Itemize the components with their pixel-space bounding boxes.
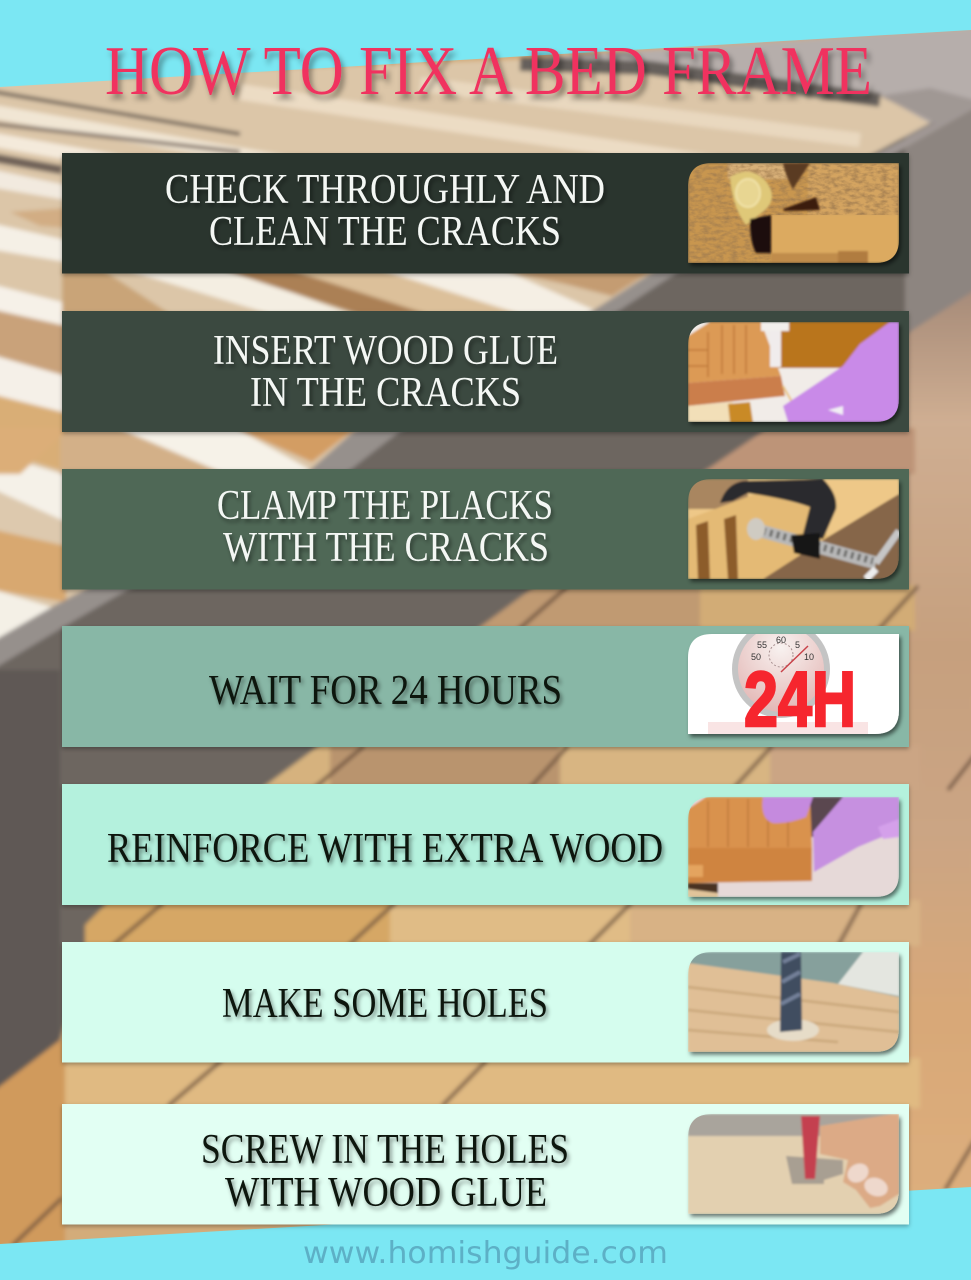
step 3 photo: C-clamp on wood bbox=[688, 479, 899, 579]
step 7 text: SCREW IN THE HOLES bbox=[201, 1127, 569, 1173]
panel: step 2 bbox=[62, 311, 909, 432]
floor seams bbox=[12, 428, 971, 1246]
step 4 photo: 24H stopwatch: 60 bbox=[776, 635, 786, 645]
step 4 photo: 24H stopwatch: 5 bbox=[795, 640, 800, 650]
step 4 photo: 24H stopwatch: 55 bbox=[757, 640, 767, 650]
step 7 photo: screw and fingers bbox=[688, 1114, 899, 1214]
top grey rim bbox=[530, 28, 971, 123]
step 6 text: MAKE SOME HOLES bbox=[222, 981, 548, 1027]
title: HOW TO FIX A BED FRAME bbox=[105, 33, 872, 110]
gap slats, panels 1-2 bbox=[62, 262, 656, 314]
step 4 photo: 24H stopwatch: 24H bbox=[744, 655, 856, 743]
left margin stripes bbox=[0, 170, 66, 642]
step 2 text: IN THE CRACKS bbox=[250, 370, 521, 416]
bed frame side bbox=[0, 100, 971, 1090]
step 4 text: WAIT FOR 24 HOURS bbox=[209, 668, 562, 714]
step 1 photo: cracked wood with glue bbox=[688, 163, 899, 263]
website URL: www.homishguide.com bbox=[303, 1236, 668, 1271]
step 6 photo: drill bit in wood bbox=[688, 952, 899, 1052]
top cyan shape bbox=[0, 0, 971, 87]
panel: step 5 bbox=[62, 784, 909, 905]
step 1 text: CLEAN THE CRACKS bbox=[209, 209, 561, 255]
slat area bbox=[0, 58, 930, 640]
panel: step 1 bbox=[62, 153, 909, 274]
step 5 text: REINFORCE WITH EXTRA WOOD bbox=[107, 826, 663, 872]
frame top-edge highlight strip bbox=[0, 270, 681, 668]
step 3 text: CLAMP THE PLACKS bbox=[217, 483, 553, 529]
step 2 text bbox=[213, 328, 558, 416]
upper slats bbox=[0, 84, 860, 215]
panel: step 6 bbox=[62, 942, 909, 1062]
panel: step 7 bbox=[62, 1104, 909, 1224]
step 7 text: WITH WOOD GLUE bbox=[225, 1170, 547, 1216]
floor strip colours seen between panels bbox=[0, 428, 920, 1255]
step 4 photo: 24H stopwatch bbox=[687, 634, 904, 740]
panel: step 4 bbox=[62, 620, 909, 747]
step 4 photo: 24H stopwatch: 50 bbox=[751, 652, 761, 662]
step 4 photo: 24H stopwatch: 10 bbox=[804, 652, 814, 662]
step 1 text bbox=[165, 167, 605, 255]
panel: step 3 bbox=[62, 469, 909, 590]
bottom cyan shape bbox=[0, 1187, 971, 1280]
gap slats, panels 2-3 bbox=[0, 428, 356, 474]
step 3 text bbox=[217, 483, 553, 571]
step 2 text: INSERT WOOD GLUE bbox=[213, 328, 558, 374]
step 3 text: WITH THE CRACKS bbox=[223, 525, 549, 571]
step 7 text bbox=[201, 1127, 569, 1216]
step 1 text: CHECK THROUGHLY AND bbox=[165, 167, 605, 213]
step 2 photo: gloved hand applying glue bbox=[688, 322, 899, 422]
step 5 photo: gloved hand pressing wood bbox=[688, 797, 899, 897]
